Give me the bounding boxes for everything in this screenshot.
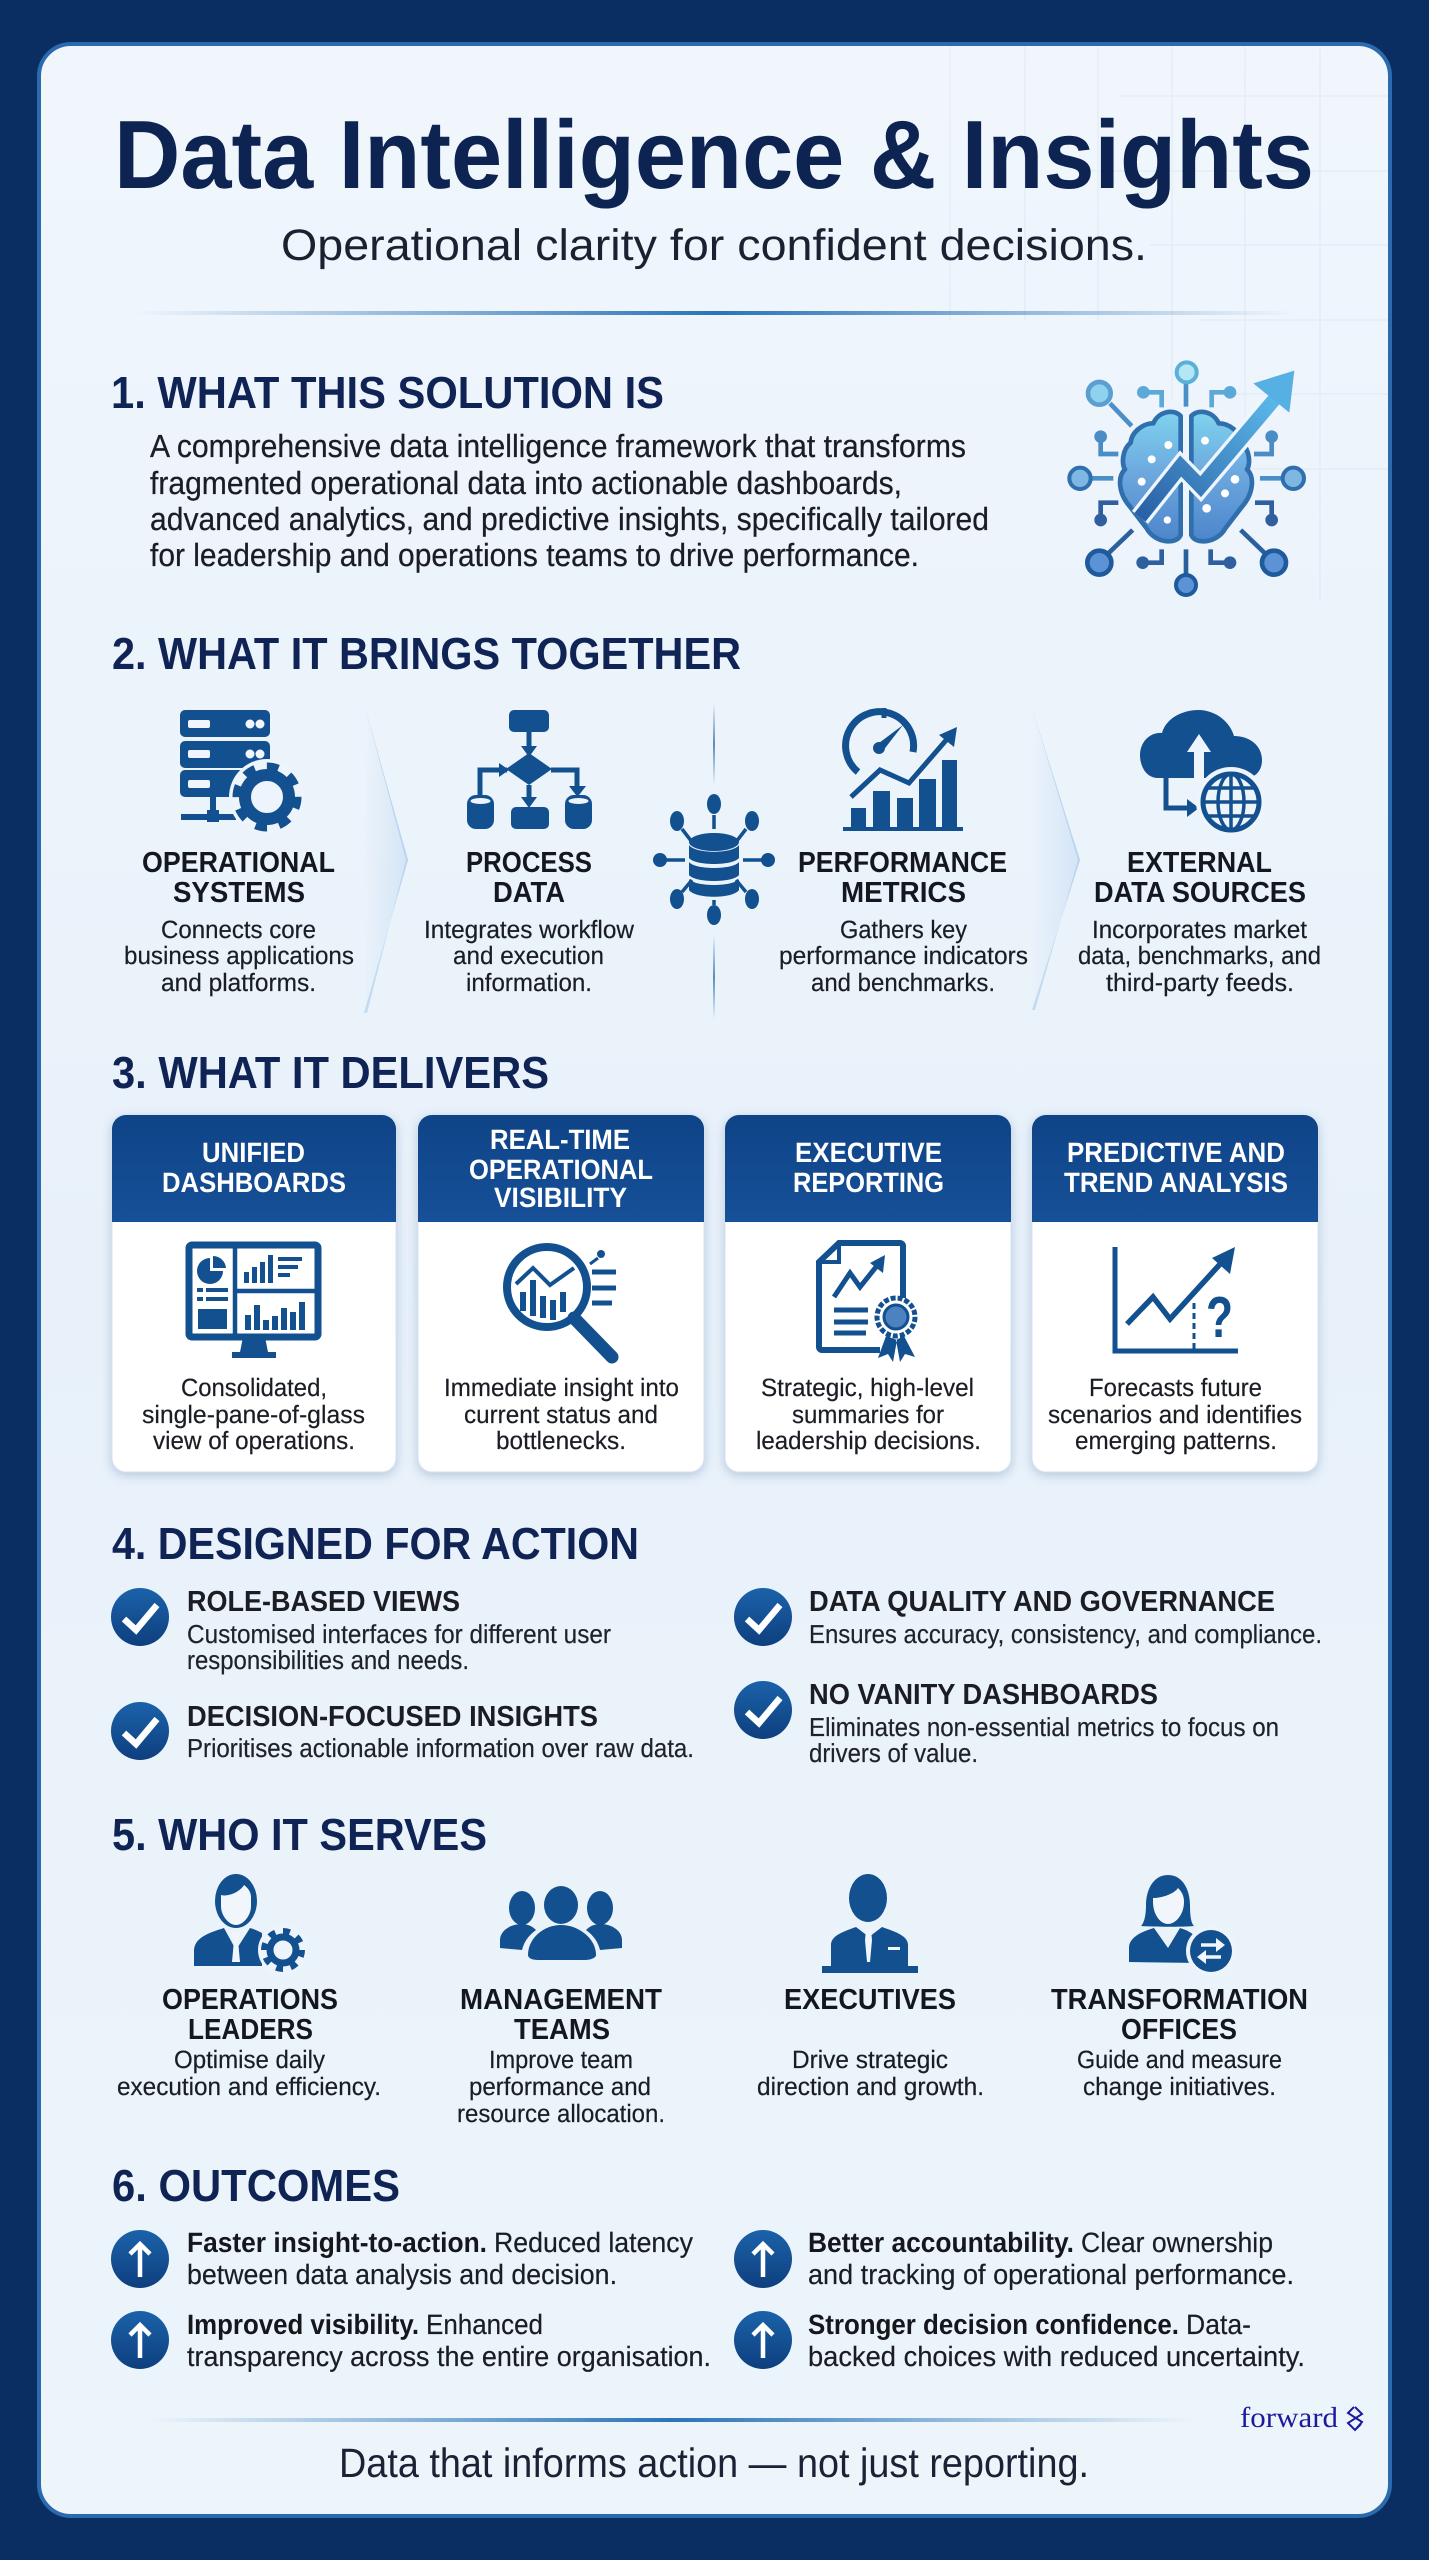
- description: scenarios and identifies: [1048, 1401, 1302, 1429]
- icon: central database hub: [653, 794, 775, 925]
- label: [1094, 847, 1306, 909]
- icon: trend chart with question mark: ?: [1206, 1285, 1233, 1350]
- card: executive reporting: REPORTING: [793, 1167, 944, 1198]
- item: decision-focused insights: Prioritises actionable information over raw data.: [187, 1733, 694, 1763]
- description: single-pane-of-glass: [142, 1401, 365, 1429]
- item: data quality and governance: Ensures accuracy, consistency, and compliance.: [809, 1619, 1322, 1649]
- description: performance indicators: [779, 942, 1028, 970]
- description: Connects core: [161, 916, 316, 944]
- outcome: faster insight-to-action: between data analysis and decision.: [187, 2259, 617, 2290]
- description: [1048, 1374, 1302, 1455]
- label: DATA SOURCES: [1094, 877, 1306, 909]
- description: and benchmarks.: [811, 969, 995, 997]
- label: TRANSFORMATION: [1051, 1984, 1308, 2016]
- description: data, benchmarks, and: [1078, 942, 1321, 970]
- icon: up arrow: [734, 2230, 792, 2288]
- item: role-based views: ROLE-BASED VIEWS: [187, 1586, 460, 1618]
- icon: process flow: [467, 710, 592, 829]
- icon: magnifier over chart: [507, 1247, 616, 1357]
- card: predictive and trend analysis: TREND ANALYSIS: [1064, 1167, 1288, 1198]
- subtitle: Operational clarity for confident decisions.: [281, 221, 1147, 270]
- heading 6: 6. OUTCOMES: [112, 2160, 400, 2211]
- description: [444, 1374, 679, 1455]
- section 3: what it delivers: [112, 1047, 1318, 1472]
- description: summaries for: [792, 1401, 944, 1429]
- icon: gauge with bar chart: [843, 708, 963, 831]
- description: current status and: [464, 1401, 658, 1429]
- item: decision-focused insights: DECISION-FOCUSED INSIGHTS: [187, 1701, 598, 1733]
- item: no vanity dashboards: NO VANITY DASHBOARDS: [809, 1679, 1158, 1711]
- description: Forecasts future: [1089, 1374, 1262, 1402]
- icon: check: [111, 1702, 169, 1760]
- section 5: who it serves: [112, 1809, 1308, 2128]
- label: OPERATIONS: [162, 1984, 338, 2016]
- item: data quality and governance: [734, 1586, 1322, 1649]
- description: [757, 2046, 984, 2101]
- outcome: stronger decision confidence: Stronger decision confidence.: [808, 2309, 1179, 2340]
- item: data quality and governance: DATA QUALITY AND GOVERNANCE: [809, 1586, 1275, 1618]
- persona: executives: [757, 1874, 984, 2101]
- persona: transformation offices: [1051, 1875, 1308, 2101]
- description: Optimise daily: [174, 2046, 325, 2074]
- description: [779, 916, 1028, 997]
- description paragraph: advanced analytics, and predictive insights, specifically tailored: [150, 501, 989, 537]
- heading 4: 4. DESIGNED FOR ACTION: [112, 1518, 639, 1569]
- label: [798, 847, 1007, 909]
- label: EXECUTIVES: [784, 1984, 956, 2016]
- label: PROCESS: [466, 847, 592, 879]
- outcome: better accountability: Better accountability.: [808, 2227, 1074, 2258]
- description: and platforms.: [161, 969, 316, 997]
- label: LEADERS: [188, 2014, 313, 2046]
- icon: up arrow: [734, 2311, 792, 2369]
- description: leadership decisions.: [756, 1427, 981, 1455]
- description: performance and: [469, 2073, 651, 2101]
- icon: check: [734, 1681, 792, 1739]
- closing tagline: Data that informs action — not just reporting.: [339, 2440, 1089, 2486]
- column: external data sources: [1078, 710, 1321, 997]
- description: third-party feeds.: [1106, 969, 1294, 997]
- description: information.: [466, 969, 592, 997]
- outcome: better accountability: [734, 2227, 1294, 2290]
- description: direction and growth.: [757, 2073, 984, 2101]
- heading 2: 2. WHAT IT BRINGS TOGETHER: [112, 628, 741, 679]
- item: no vanity dashboards: Eliminates non-essential metrics to focus on: [809, 1712, 1279, 1742]
- outcome: better accountability: and tracking of operational performance.: [808, 2259, 1294, 2290]
- description: [756, 1374, 981, 1455]
- label: OPERATIONAL: [142, 847, 335, 879]
- icon: dashboard monitor: [189, 1245, 318, 1358]
- persona: operations leaders: [117, 1874, 381, 2101]
- label: [142, 847, 335, 909]
- card header: [1032, 1115, 1318, 1222]
- description: [1077, 2046, 1282, 2101]
- description paragraph: fragmented operational data into actionable dashboards,: [150, 465, 902, 501]
- icon: up arrow: [111, 2311, 169, 2369]
- label: [162, 1984, 338, 2046]
- icon: executive in suit: [822, 1874, 918, 1973]
- description: and execution: [453, 942, 604, 970]
- description: change initiatives.: [1083, 2073, 1276, 2101]
- outcome: faster insight-to-action: [111, 2227, 693, 2290]
- outcome: stronger decision confidence: [734, 2309, 1305, 2372]
- card: real-time operational visibility: [418, 1115, 704, 1472]
- description: Gathers key: [840, 916, 967, 944]
- icon: server rack with gear: [180, 710, 305, 835]
- card: unified dashboards: UNIFIED: [202, 1137, 305, 1168]
- outcome: stronger decision confidence: backed choices with reduced uncertainty.: [808, 2341, 1305, 2372]
- section 4: designed for action: [111, 1518, 1322, 1768]
- description: business applications: [124, 942, 354, 970]
- description: Immediate insight into: [444, 1374, 679, 1402]
- description: Drive strategic: [792, 2046, 948, 2074]
- column: performance metrics: [779, 708, 1028, 997]
- icon: trend chart with question mark: [1115, 1247, 1238, 1351]
- title: Data Intelligence & Insights: [114, 100, 1314, 209]
- description: bottlenecks.: [496, 1427, 626, 1455]
- section 1: what this solution is: [111, 362, 1304, 595]
- item: role-based views: [111, 1586, 611, 1675]
- icon: check: [734, 1588, 792, 1646]
- card: predictive and trend analysis: [1032, 1115, 1318, 1472]
- card: executive reporting: [725, 1115, 1011, 1472]
- item: no vanity dashboards: drivers of value.: [809, 1738, 978, 1768]
- heading 3: 3. WHAT IT DELIVERS: [112, 1047, 549, 1098]
- icon: up arrow: [111, 2230, 169, 2288]
- icon: person with gear: [194, 1874, 308, 1975]
- icon: woman with exchange badge: [1129, 1875, 1236, 1976]
- label: SYSTEMS: [173, 877, 305, 909]
- description paragraph: [150, 428, 989, 573]
- icon: check: [111, 1588, 169, 1646]
- description: Integrates workflow: [424, 916, 635, 944]
- heading 5: 5. WHO IT SERVES: [112, 1809, 487, 1860]
- item: role-based views: Customised interfaces for different user: [187, 1619, 611, 1649]
- item: no vanity dashboards: [734, 1679, 1279, 1768]
- description: [457, 2046, 665, 2128]
- description: [142, 1374, 365, 1455]
- card: predictive and trend analysis: PREDICTIVE AND: [1067, 1137, 1285, 1168]
- label: MANAGEMENT: [460, 1984, 662, 2016]
- label: [460, 1984, 662, 2046]
- section 6: outcomes: [111, 2160, 1305, 2372]
- item: role-based views: responsibilities and needs.: [187, 1645, 469, 1675]
- heading 1: 1. WHAT THIS SOLUTION IS: [111, 367, 664, 418]
- icon: report with seal: [819, 1243, 915, 1362]
- description: Consolidated,: [181, 1374, 327, 1402]
- label: EXTERNAL: [1127, 847, 1272, 879]
- description: Guide and measure: [1077, 2046, 1282, 2074]
- card header: [418, 1115, 704, 1222]
- outcome: improved visibility: Improved visibility.: [187, 2309, 419, 2340]
- description: [124, 916, 354, 997]
- description: Incorporates market: [1092, 916, 1307, 944]
- outcome: improved visibility: Enhanced: [426, 2309, 543, 2340]
- icon: group of people: [500, 1886, 622, 1960]
- description: emerging patterns.: [1075, 1427, 1277, 1455]
- description: resource allocation.: [457, 2100, 665, 2128]
- section 2: what it brings together: [112, 628, 1321, 1019]
- label: PERFORMANCE: [798, 847, 1007, 879]
- description: [1078, 916, 1321, 997]
- label: [466, 847, 592, 909]
- card: real-time operational visibility: VISIBILITY: [494, 1182, 627, 1213]
- outcome: improved visibility: [111, 2309, 711, 2372]
- persona: management teams: [457, 1886, 665, 2128]
- card: real-time operational visibility: OPERATIONAL: [469, 1154, 653, 1185]
- outcome: stronger decision confidence: Data-: [1186, 2309, 1251, 2340]
- description paragraph: for leadership and operations teams to drive performance.: [150, 537, 919, 573]
- label: METRICS: [841, 877, 966, 909]
- description paragraph: A comprehensive data intelligence framework that transforms: [150, 428, 966, 464]
- label: [1051, 1984, 1308, 2046]
- outcome: improved visibility: transparency across the entire organisation.: [187, 2341, 711, 2372]
- description: view of operations.: [153, 1427, 355, 1455]
- icon: AI brain with rising arrow: [1069, 362, 1304, 595]
- card: executive reporting: EXECUTIVE: [795, 1137, 942, 1168]
- icon: cloud with globe: [1140, 710, 1266, 837]
- label: DATA: [493, 877, 565, 909]
- card: unified dashboards: [112, 1115, 396, 1472]
- card: real-time operational visibility: REAL-TIME: [490, 1124, 630, 1155]
- description: execution and efficiency.: [117, 2073, 381, 2101]
- item: decision-focused insights: [111, 1701, 694, 1763]
- label: TEAMS: [514, 2014, 610, 2046]
- logo: forward: forward: [1240, 2402, 1339, 2434]
- outcome: faster insight-to-action: Faster insight-to-action.: [187, 2227, 487, 2258]
- description: [424, 916, 635, 997]
- description: [117, 2046, 381, 2101]
- column: operational systems: [124, 710, 354, 997]
- label: OFFICES: [1121, 2014, 1237, 2046]
- description: Strategic, high-level: [761, 1374, 974, 1402]
- card: unified dashboards: DASHBOARDS: [162, 1167, 346, 1198]
- outcome: better accountability: Clear ownership: [1081, 2227, 1273, 2258]
- description: Improve team: [489, 2046, 633, 2074]
- outcome: faster insight-to-action: Reduced latency: [494, 2227, 693, 2258]
- column: process data: [424, 710, 635, 997]
- card header: [112, 1115, 396, 1222]
- card header: [725, 1115, 1011, 1222]
